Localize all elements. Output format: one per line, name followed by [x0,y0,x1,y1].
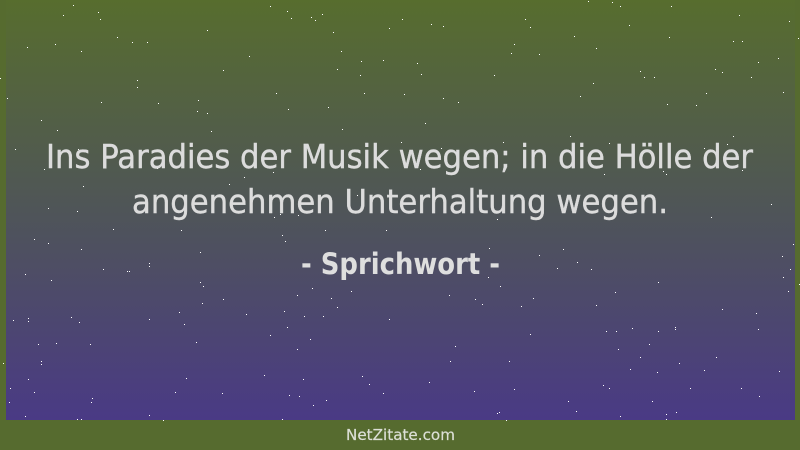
quote line 1: Ins Paradies der Musik wegen; in die Hölle der [46,138,754,176]
quote line 2: angenehmen Unterhaltung wegen. [132,183,668,221]
quote text [46,138,754,221]
attribution: - Sprichwort - [301,247,500,281]
footer brand: NetZitate.com [346,426,455,444]
